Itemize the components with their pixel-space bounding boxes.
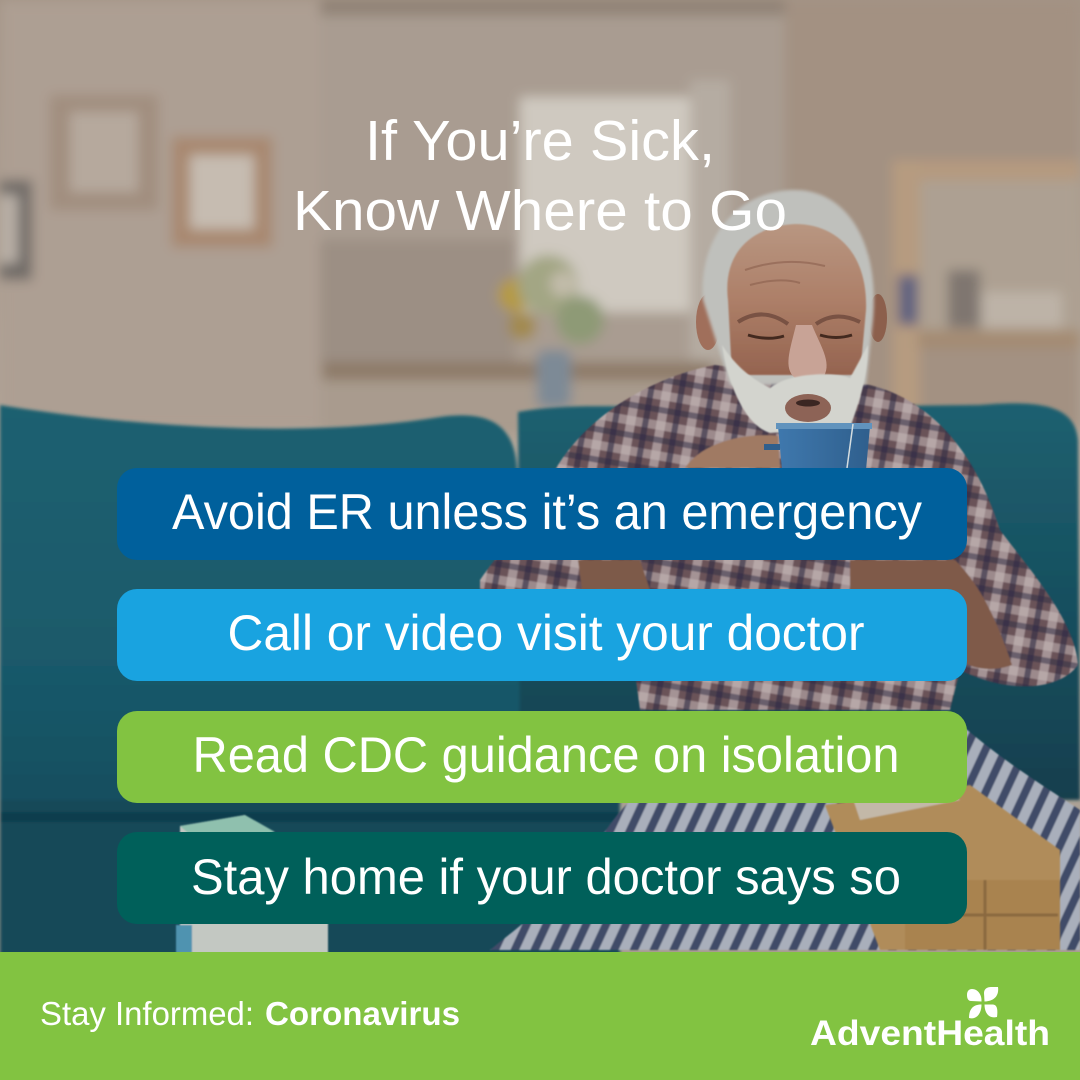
panel: read CDC guidance bbox=[117, 711, 967, 803]
medicine box bbox=[176, 815, 328, 955]
sofa bbox=[0, 403, 1080, 960]
title: Know Where to Go bbox=[293, 179, 787, 243]
hands and forearms bbox=[578, 560, 650, 590]
mug bbox=[764, 423, 872, 470]
footer text: Coronavirus bbox=[265, 995, 460, 1032]
man body: shirt bbox=[480, 365, 1080, 950]
panel: read CDC guidance: Read CDC guidance on isolation bbox=[192, 727, 900, 783]
footer text bbox=[40, 995, 460, 1032]
man head bbox=[696, 190, 887, 433]
title bbox=[293, 109, 787, 243]
panel: call or video visit bbox=[117, 589, 967, 681]
panel: avoid ER: Avoid ER unless it’s an emergency bbox=[172, 484, 922, 540]
title: If You’re Sick, bbox=[365, 109, 715, 173]
tissue box bbox=[825, 772, 1060, 950]
shelf bbox=[892, 160, 1080, 180]
panel: stay home bbox=[117, 832, 967, 924]
panel: stay home: Stay home if your doctor says so bbox=[191, 849, 901, 905]
logo: AdventHealth bbox=[810, 987, 1050, 1053]
logo: AdventHealth: AdventHealth bbox=[810, 1014, 1050, 1053]
footer text: Stay Informed: bbox=[40, 995, 254, 1032]
flowers and vase bbox=[498, 278, 532, 312]
panel: call or video visit: Call or video visit your doctor bbox=[228, 605, 864, 661]
footer band bbox=[0, 952, 1080, 1080]
picture frames bbox=[50, 95, 158, 210]
panel: avoid ER bbox=[117, 468, 967, 560]
